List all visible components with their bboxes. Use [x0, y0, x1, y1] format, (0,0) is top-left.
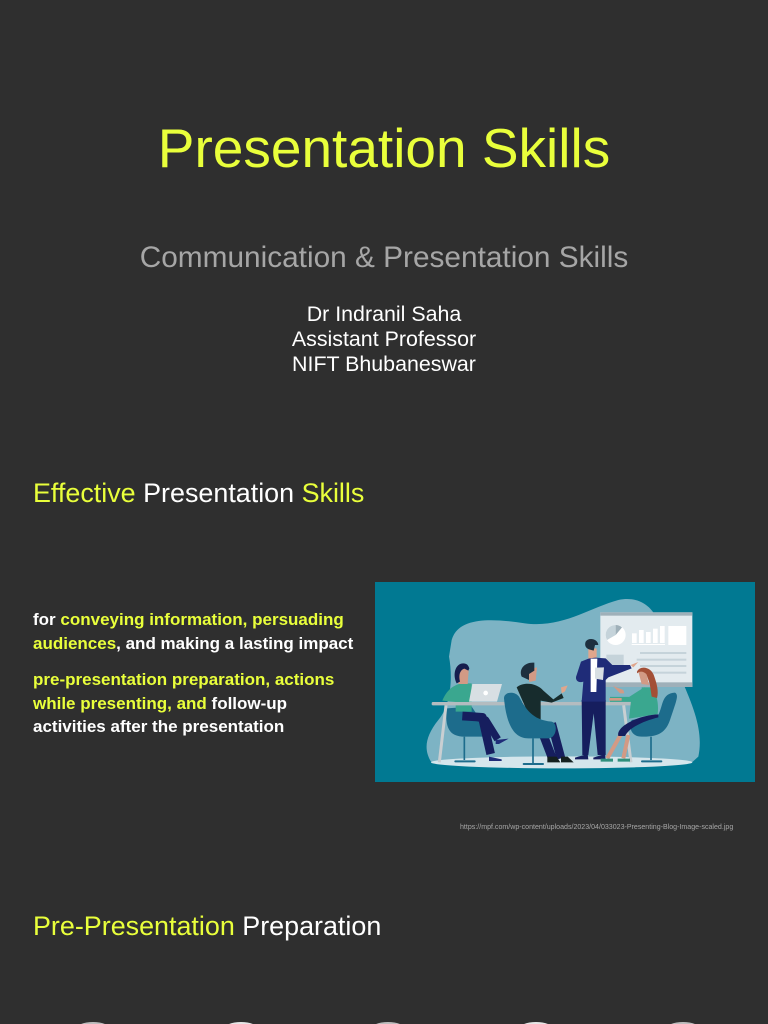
- whiteboard: [600, 612, 692, 687]
- floor ellipse: [431, 756, 692, 768]
- text block: purpose: audiences, and making a lasting impact: [33, 634, 353, 652]
- person: man in chair: [504, 663, 574, 765]
- table: [432, 702, 633, 762]
- bar chart: [632, 626, 686, 645]
- row of cropped circles: [81, 1022, 695, 1024]
- subtitle: Communication & Presentation Skills: [140, 241, 628, 274]
- text block: stages: [33, 670, 334, 736]
- illustration background: [375, 582, 755, 782]
- text block: stages: pre-presentation preparation, actions: [33, 670, 334, 689]
- person: woman with red hair: [601, 668, 677, 762]
- background blob: [427, 599, 700, 763]
- text block: purpose: for conveying information, persuading: [33, 610, 344, 629]
- person: presenter standing: [575, 639, 638, 759]
- text block: stages: activities after the presentation: [33, 717, 284, 736]
- circle 5: [666, 1022, 700, 1024]
- author details: Dr Indranil Saha: [307, 302, 461, 326]
- circle 3: [371, 1022, 405, 1024]
- author details: NIFT Bhubaneswar: [292, 352, 476, 376]
- illustration: team meeting: [375, 582, 755, 782]
- author details: [292, 302, 476, 376]
- person: woman with laptop: [442, 663, 509, 762]
- author details: Assistant Professor: [292, 327, 476, 351]
- image source url: https://mpf.com/wp-content/uploads/2023/04/033023-Presenting-Blog-Image-scaled.jpg: [460, 824, 733, 831]
- circle 1: [76, 1022, 110, 1024]
- circle 2: [224, 1022, 258, 1024]
- heading: effective presentation skills: Effective Presentation Skills: [33, 478, 364, 508]
- title: Presentation Skills: [158, 117, 610, 179]
- pie chart: [606, 625, 626, 645]
- heading: pre-presentation preparation: Pre-Presentation Preparation: [33, 911, 381, 941]
- text block: stages: while presenting, and follow-up: [33, 694, 287, 712]
- circle 4: [519, 1022, 553, 1024]
- text block: purpose: [33, 610, 354, 652]
